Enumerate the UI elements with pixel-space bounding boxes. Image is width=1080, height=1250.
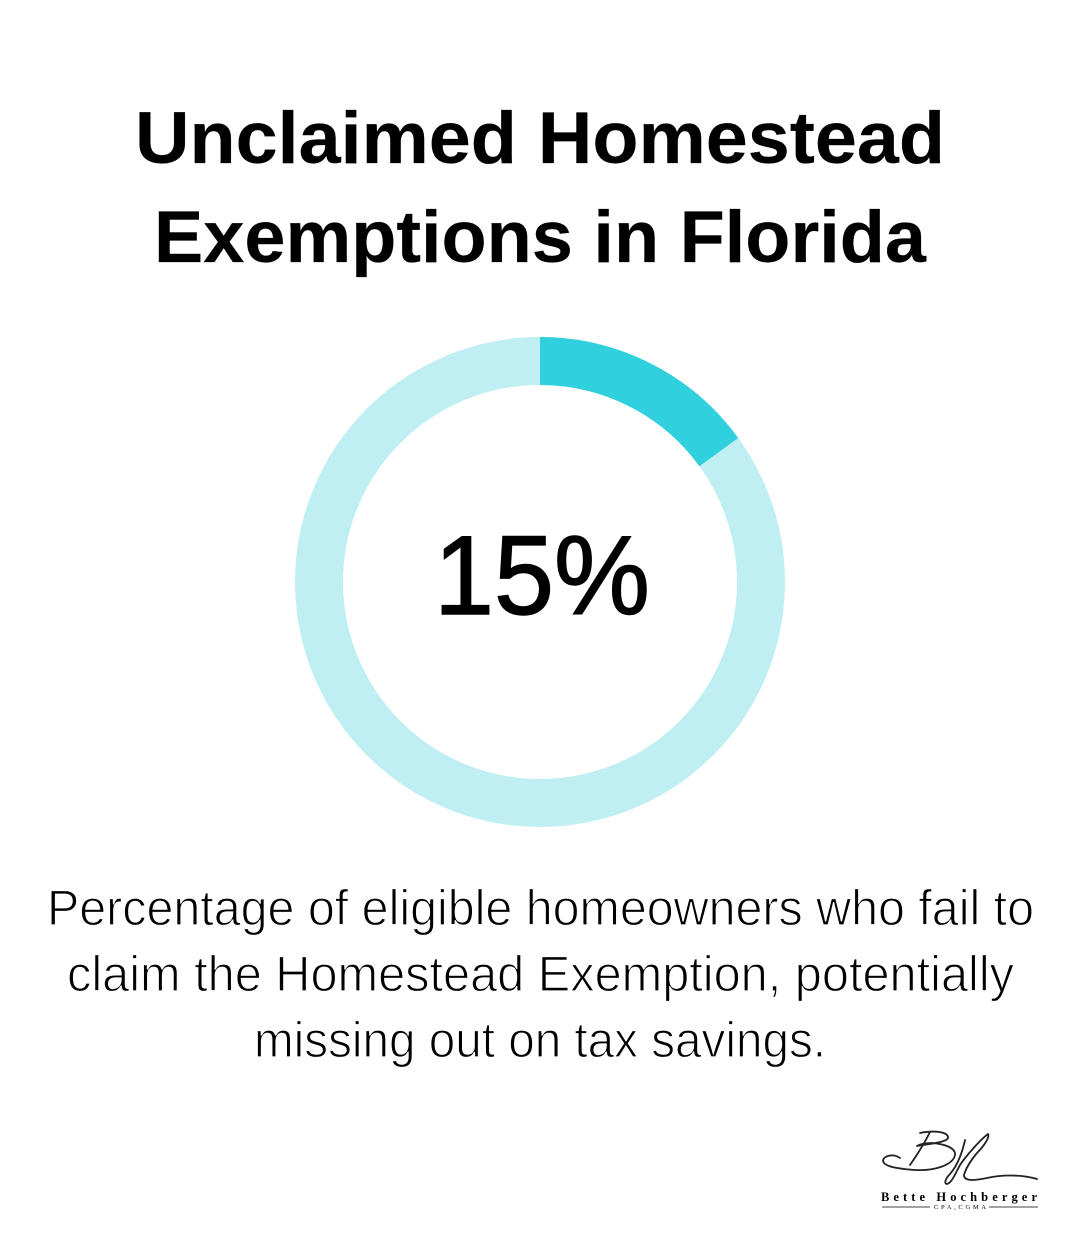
description text: claim the Homestead Exemption, potentially — [67, 946, 1014, 1002]
logo rules — [882, 1206, 1038, 1208]
title — [135, 98, 945, 278]
logo name: Bette Hochberger — [881, 1190, 1037, 1204]
signature monogram — [883, 1132, 1037, 1184]
title: Unclaimed Homestead — [135, 98, 945, 179]
percentage value: 15% — [434, 513, 650, 638]
logo: Bette Hochberger signature — [881, 1132, 1038, 1211]
logo credentials: CPA,CGMA — [934, 1204, 986, 1211]
donut chart: 15% — [319, 361, 761, 803]
description text — [47, 880, 1034, 1068]
description text: Percentage of eligible homeowners who fail to — [47, 880, 1034, 936]
description text: missing out on tax savings. — [254, 1012, 826, 1068]
title: Exemptions in Florida — [154, 197, 927, 278]
